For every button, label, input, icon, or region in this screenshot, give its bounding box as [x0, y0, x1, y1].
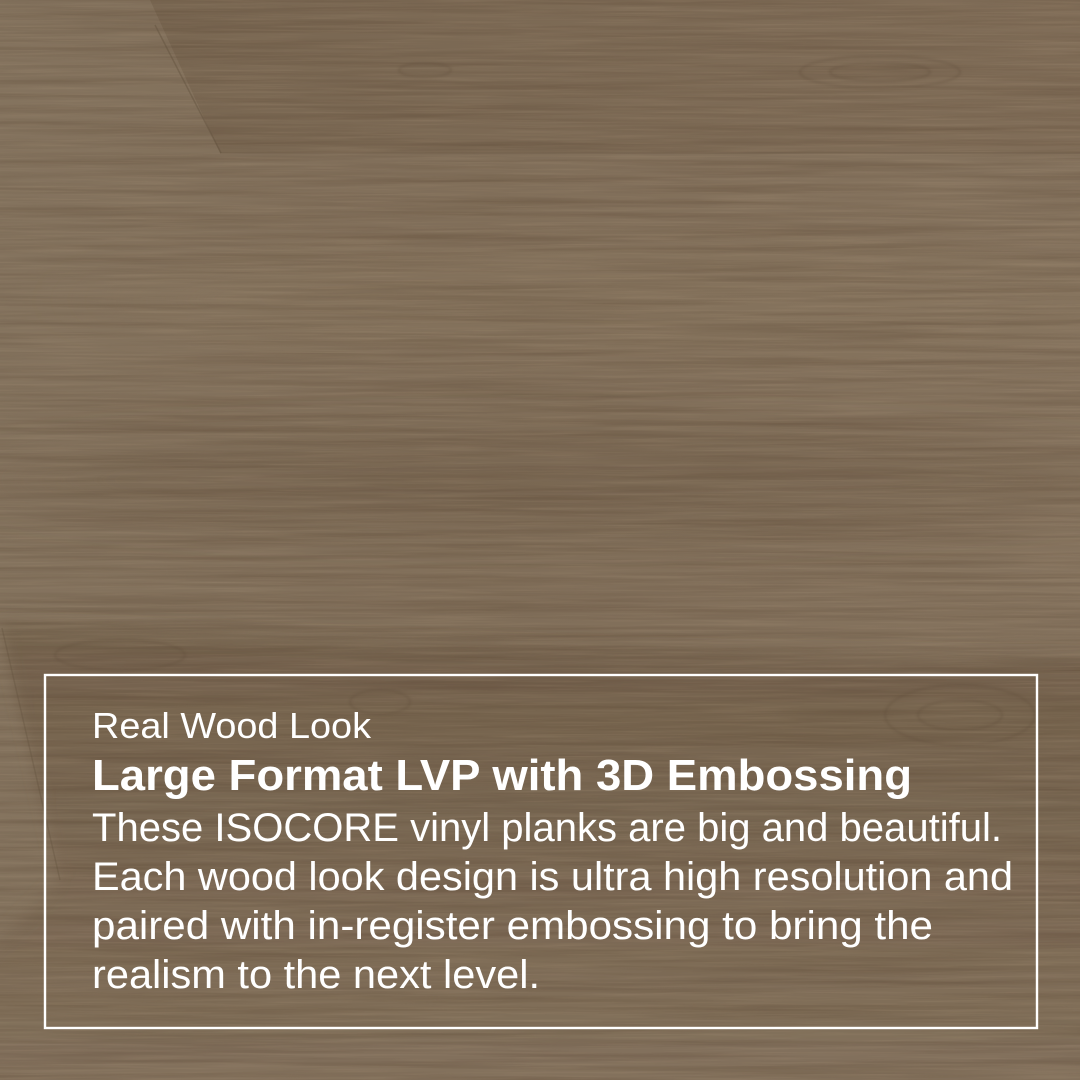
body text: realism to the next level. — [92, 953, 540, 997]
body text: Each wood look design is ultra high resolution and — [92, 855, 1013, 899]
eyebrow: Real Wood Look: Real Wood Look — [92, 705, 372, 746]
body text: paired with in-register embossing to bring the — [92, 904, 933, 948]
text panel with white outline — [45, 675, 1037, 1028]
heading: Large Format LVP with 3D Embossing — [92, 751, 912, 800]
wood knots — [55, 56, 1035, 745]
body text: These ISOCORE vinyl planks are big and beautiful. — [92, 806, 1002, 850]
body text — [92, 806, 1013, 997]
